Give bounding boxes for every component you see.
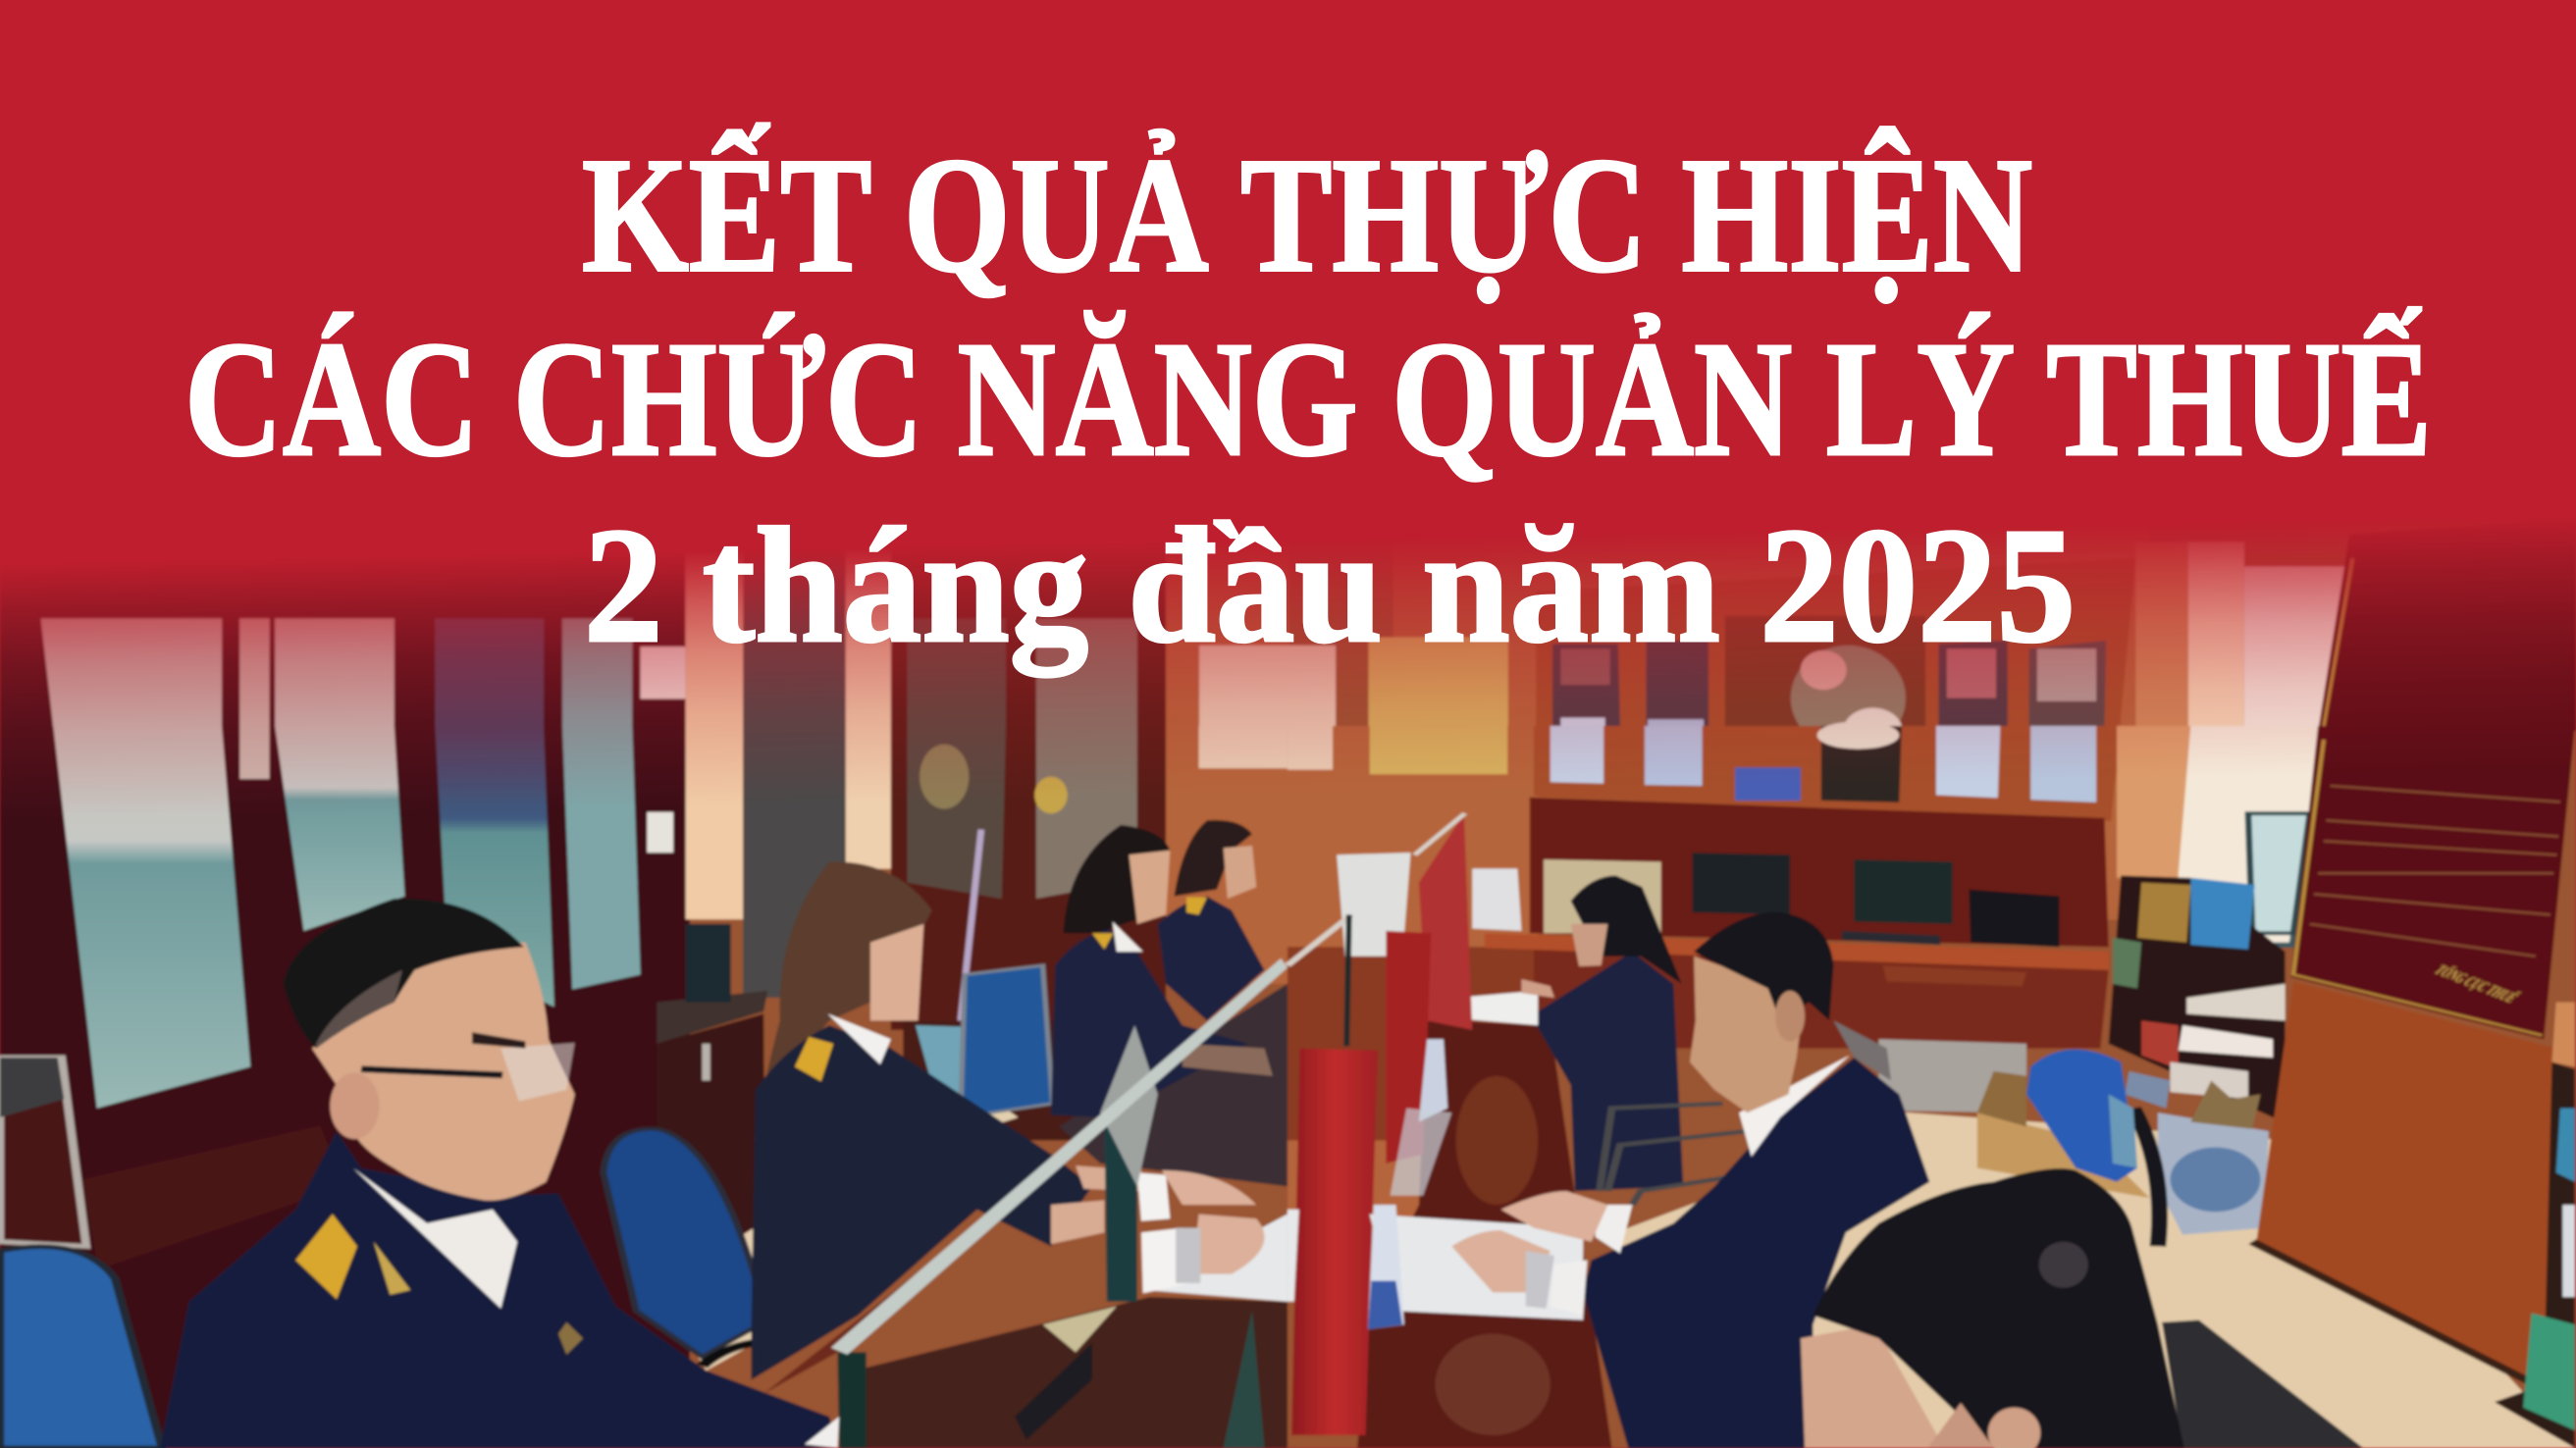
red gradient fade over photo bbox=[0, 471, 2576, 824]
photo: client side counter and seated woman bbox=[1288, 813, 1683, 1448]
photo: back desk wall, computers and floor bbox=[1288, 721, 2575, 1448]
photo: lower left cabinets, sideboard and door bbox=[0, 726, 1289, 1448]
photo: staff woman in navy uniform bbox=[743, 861, 1256, 1380]
photo: tax office service counter bbox=[0, 517, 2576, 1448]
photo: back desk wall, computers and floor: TỔNG CỤC THUẾ bbox=[2430, 961, 2524, 1006]
photo: foreground staff man with glasses bbox=[160, 899, 839, 1448]
photo: back wall with certificates and shelves bbox=[1199, 517, 2576, 953]
title bbox=[184, 124, 2432, 677]
photo: upper left cabinets and wall bbox=[0, 519, 1289, 728]
title line 1: KẾT QUẢ THỰC HIỆN bbox=[582, 124, 2032, 306]
photo: client man in dark suit bbox=[1451, 912, 1929, 1448]
photo: counter desk and red dividers bbox=[763, 958, 1288, 1448]
title line 3: period: 2 tháng đầu năm 2025 bbox=[584, 494, 2076, 677]
icon: blue office chair headrest bbox=[2026, 1050, 2160, 1246]
photo: foreground client head and chair bbox=[1801, 1168, 2363, 1448]
icon: blue chairs behind staff bbox=[0, 965, 1053, 1448]
photo: rear staff seen through partition bbox=[1051, 820, 1288, 1186]
